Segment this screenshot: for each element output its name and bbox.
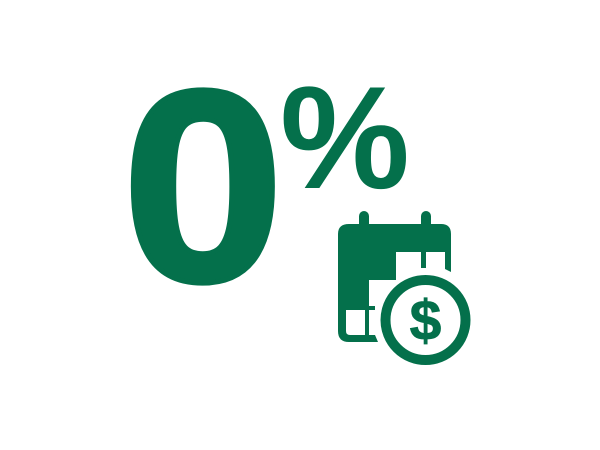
calendar ring right (421, 211, 431, 241)
heading: zero digit: 0 (122, 33, 284, 338)
calendar small bar (365, 306, 375, 310)
calendar ring left (359, 211, 369, 241)
calendar body (338, 224, 451, 342)
dollar symbol: $ (410, 289, 441, 353)
coin (386, 280, 466, 360)
calendar small stem (365, 310, 369, 335)
heading: percent sign: % (280, 56, 410, 219)
calendar hanging tab (421, 250, 426, 268)
icon: calendar with dollar coin (338, 211, 466, 360)
